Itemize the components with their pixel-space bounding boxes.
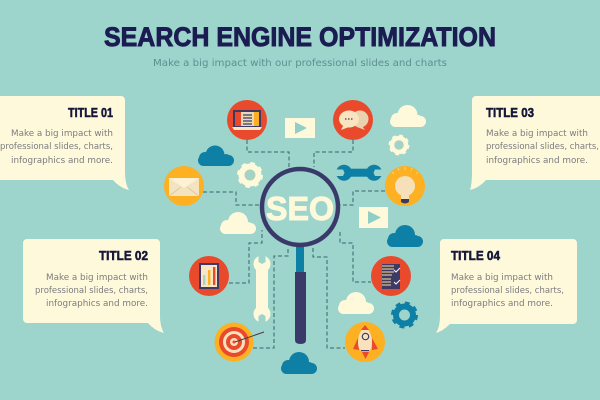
icon: blue cloud left <box>198 146 234 166</box>
title: SEARCH ENGINE OPTIMIZATION <box>104 22 496 52</box>
text block: title 02 <box>35 272 148 308</box>
icon: cream wrench <box>254 254 270 324</box>
icon: blue cloud bottom <box>281 352 317 374</box>
icon: laptop <box>227 100 267 140</box>
panel: title 02 <box>23 239 164 333</box>
panel: title 01 <box>0 96 129 190</box>
panel: title 04 <box>436 239 577 333</box>
handle neck <box>296 246 304 274</box>
text block: title 04: Make a big impact with <box>451 272 553 282</box>
lens ring <box>262 169 338 245</box>
icon: chat bubbles <box>333 100 373 140</box>
text block: title 03: Make a big impact with <box>486 128 588 138</box>
text block: title 01: Make a big impact with <box>11 128 113 138</box>
icon: light bulb <box>385 166 425 206</box>
icon: play card top <box>285 118 315 138</box>
text block: title 02: Make a big impact with <box>46 272 148 282</box>
text block: title 04 <box>451 272 564 308</box>
icon: cream gear right <box>390 136 408 154</box>
icon: envelope <box>164 166 204 206</box>
icon: cream gear left <box>238 164 262 186</box>
icon: bar chart card <box>189 256 229 296</box>
subtitle: Make a big impact with our professional slides and charts <box>153 58 447 69</box>
text block: title 03: professional slides, charts, <box>486 141 599 151</box>
text block: title 01: professional slides, charts, <box>0 141 113 151</box>
icon: target <box>214 322 264 362</box>
icon: blue cloud right <box>387 225 423 247</box>
text block: title 02: professional slides, charts, <box>35 285 148 295</box>
text block: title 01 <box>0 128 113 165</box>
icon: play card right <box>359 207 388 228</box>
heading: title 01: TITLE 01 <box>68 106 113 120</box>
handle grip <box>295 272 306 344</box>
text block: title 02: infographics and more. <box>46 298 148 308</box>
icon: cream cloud bottom right <box>338 292 374 314</box>
icon: cream cloud top right <box>390 105 426 127</box>
dashed connectors <box>203 140 385 348</box>
heading: title 02: TITLE 02 <box>99 249 148 263</box>
text block: title 03 <box>486 128 599 165</box>
panel: title 03 <box>470 96 600 190</box>
icon: checklist <box>371 256 411 296</box>
icon: cream cloud centre left <box>220 212 256 234</box>
icon: rocket <box>345 322 385 362</box>
text block: title 03: infographics and more. <box>486 155 588 165</box>
lens label: SEO <box>266 190 334 227</box>
heading: title 03: TITLE 03 <box>486 106 534 120</box>
heading: title 04: TITLE 04 <box>451 249 500 263</box>
text block: title 04: infographics and more. <box>451 298 553 308</box>
icon: blue gear <box>392 303 416 327</box>
text block: title 01: infographics and more. <box>11 155 113 165</box>
text block: title 04: professional slides, charts, <box>451 285 564 295</box>
icon: blue wrench <box>335 165 383 181</box>
magnifying glass <box>262 169 338 344</box>
